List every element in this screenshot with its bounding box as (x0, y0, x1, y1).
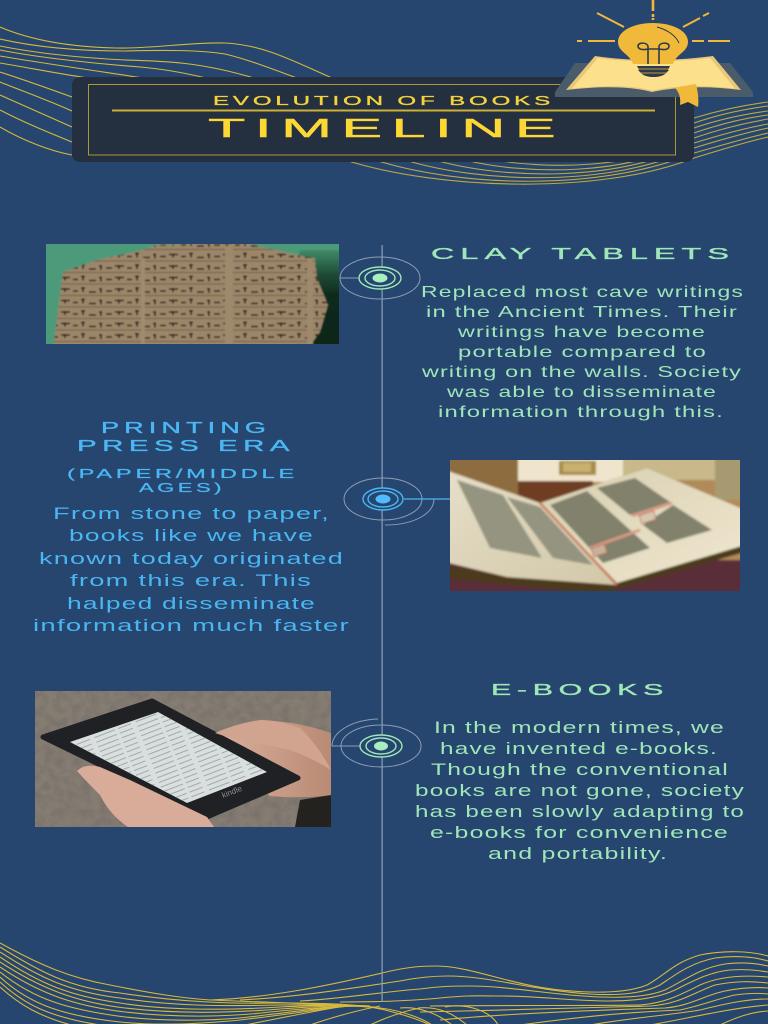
body: e-books: In the modern times, we (434, 719, 725, 737)
heading: printing press era (77, 420, 295, 455)
body: printing press era: known today originated (39, 549, 344, 568)
text block: clay tablets (421, 246, 744, 421)
icon: light bulb (577, 0, 730, 77)
kindle logo text: kindle (220, 784, 244, 800)
heading: clay tablets: CLAY TABLETS (431, 246, 735, 263)
body: e-books: has been slowly adapting to (415, 803, 745, 821)
title: evolution of books: EVOLUTION OF BOOKS (213, 94, 554, 108)
title: timeline: TIMELINE (208, 113, 565, 143)
body: e-books (415, 719, 745, 863)
body: printing press era: information much faster (33, 616, 350, 635)
body: printing press era: From stone to paper, (53, 504, 330, 523)
body: clay tablets: information through this. (438, 404, 724, 421)
body: printing press era: halped disseminate (67, 594, 316, 613)
node: printing press (344, 478, 450, 525)
text block: e-books (415, 682, 745, 863)
body: clay tablets (421, 284, 744, 421)
title panel (72, 77, 694, 162)
subheading: paper / middle ages: AGES) (139, 481, 225, 495)
body: clay tablets: was able to disseminate (446, 384, 717, 401)
heading: e-books: E-BOOKS (491, 682, 669, 699)
body: clay tablets: writings have become (457, 324, 706, 341)
body: printing press era: books like we have (69, 526, 314, 545)
photo: gutenberg bible (445, 455, 745, 595)
top right wave lines (345, 102, 768, 184)
body: clay tablets: Replaced most cave writings (421, 284, 744, 301)
photo: kindle e-reader (35, 691, 331, 827)
body: clay tablets: portable compared to (458, 344, 707, 361)
timeline axis (382, 245, 383, 1002)
body: e-books: have invented e-books. (440, 740, 718, 758)
photo: clay tablet (46, 244, 339, 344)
body: clay tablets: writing on the walls. Society (421, 364, 742, 381)
body: printing press era: from this era. This (70, 571, 312, 590)
body: e-books: and portability. (488, 845, 668, 863)
top left wave lines (0, 27, 332, 155)
body: e-books: books are not gone, society (415, 782, 745, 800)
subheading: paper / middle ages (67, 467, 298, 495)
body: clay tablets: in the Ancient Times. Their (426, 304, 738, 321)
rays (577, 0, 730, 41)
icon: bookmark ribbon (675, 84, 698, 107)
body: printing press era (33, 504, 350, 635)
icon: open book (555, 56, 753, 107)
subheading: paper / middle ages: (PAPER/MIDDLE (67, 467, 298, 481)
bottom wave lines (0, 943, 768, 1024)
text block: printing press era (33, 420, 350, 635)
node: e-books (332, 719, 421, 767)
body: e-books: Though the conventional (431, 761, 729, 779)
heading: printing press era: PRINTING (101, 420, 271, 437)
heading: printing press era: PRESS ERA (77, 438, 295, 455)
node: clay tablets (340, 257, 420, 299)
body: e-books: e-books for convenience (430, 824, 729, 842)
